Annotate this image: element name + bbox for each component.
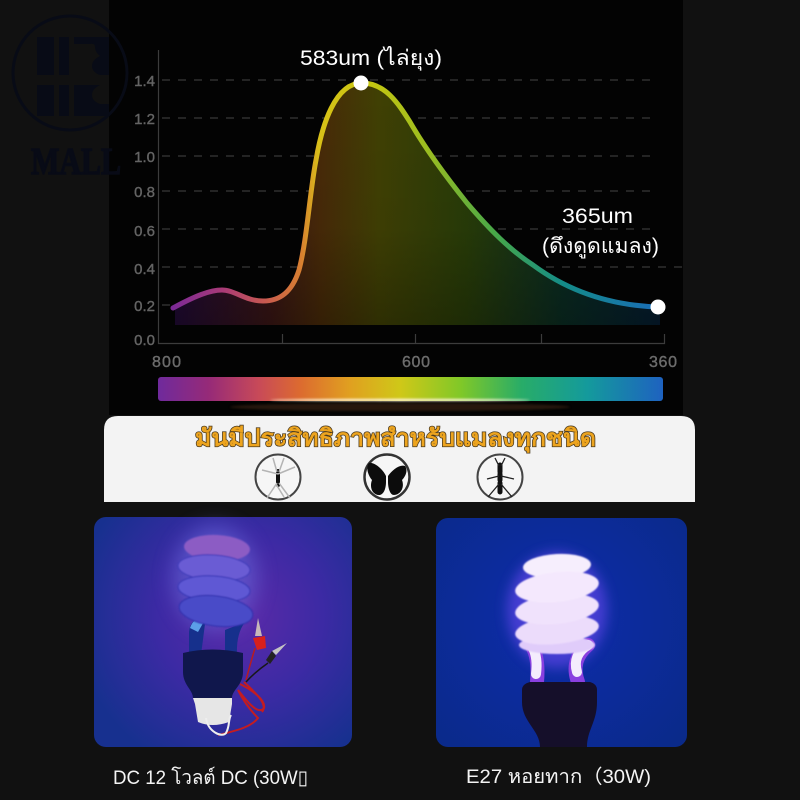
y axis labels: 0.2	[134, 298, 155, 315]
bulb base	[183, 650, 243, 698]
bulb coil	[177, 533, 255, 630]
y axis labels: 1.2	[134, 111, 155, 128]
bulb legs	[533, 645, 588, 682]
grid lines	[162, 80, 683, 305]
area fill	[175, 83, 660, 325]
marker: 365	[650, 300, 666, 314]
icon: butterfly	[364, 454, 410, 500]
label: 365um: 365um	[562, 205, 633, 228]
caption: E27: E27 หอยทาก（30W)	[466, 766, 651, 788]
wires	[206, 648, 268, 735]
panel: insects	[104, 416, 695, 502]
x axis labels: 600	[402, 354, 430, 371]
x axis labels: 800	[152, 354, 181, 371]
icon: mosquito	[256, 454, 300, 500]
bulb glow	[173, 526, 257, 630]
label: attract insects: (ดึงดูดแมลง)	[542, 235, 659, 259]
caption: DC 12V: DC 12 โวลต์ DC (30W▯	[113, 766, 308, 789]
bulb coil	[514, 552, 600, 654]
watermark logo: MALL	[31, 141, 121, 183]
axes	[158, 50, 664, 344]
icon: ant	[478, 454, 522, 500]
x axis labels: 360	[649, 354, 677, 371]
bulb legs	[189, 616, 245, 655]
curve	[173, 83, 658, 308]
watermark logo	[13, 16, 127, 183]
marker: peak	[354, 76, 368, 90]
lamp holder	[193, 698, 232, 725]
label: 583um: 583um (ไล่ยุง)	[300, 46, 442, 71]
y axis labels: 0.4	[134, 261, 155, 278]
panel: chart background	[109, 0, 683, 415]
y axis labels: 0.0	[134, 332, 155, 349]
y axis labels: 0.6	[134, 223, 155, 240]
bulb glow	[507, 552, 607, 668]
y axis labels	[134, 73, 155, 349]
x axis labels	[152, 354, 677, 371]
panel: DC 12V bulb photo	[94, 517, 352, 747]
panel: E27 bulb photo	[436, 518, 687, 747]
bulb base	[522, 682, 597, 747]
spectrum bar	[158, 377, 663, 411]
y axis labels: 1.4	[134, 73, 155, 90]
chart: spectrum curve	[134, 46, 683, 371]
y axis labels: 0.8	[134, 184, 155, 201]
heading: มันมีประสิทธิภาพสำหรับแมลงทุกชนิด	[195, 425, 596, 454]
y axis labels: 1.0	[134, 149, 155, 166]
clips	[253, 618, 287, 664]
